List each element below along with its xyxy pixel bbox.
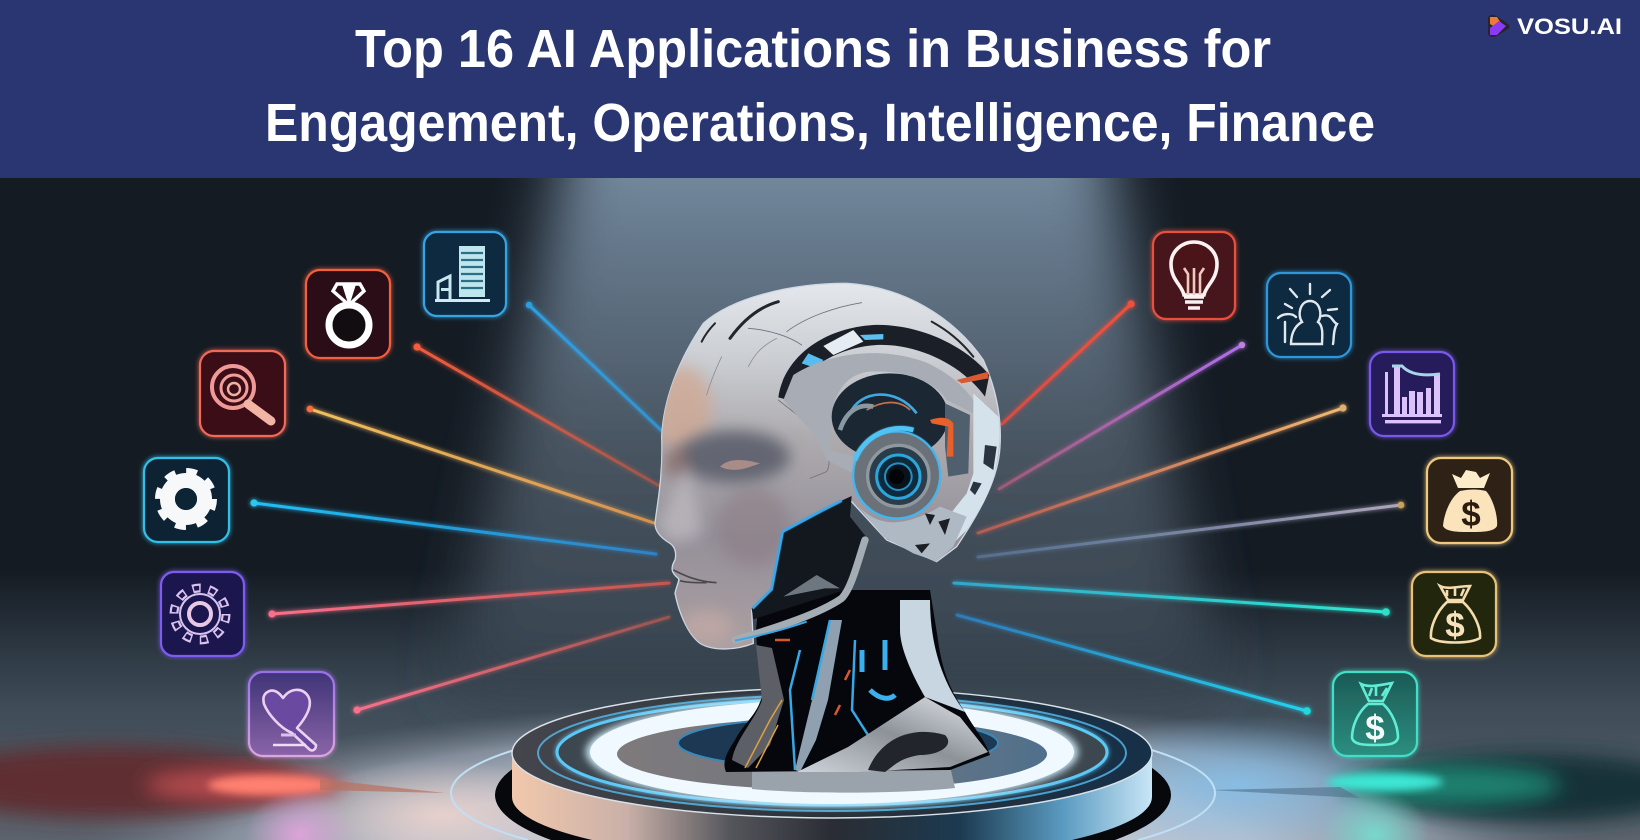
icon: building (424, 232, 506, 316)
icon: money bag outline (1412, 572, 1496, 656)
hole front wall (752, 766, 955, 793)
skull grooves (702, 302, 973, 478)
line: bag two (954, 583, 1390, 616)
icon: light bulb (1153, 232, 1235, 319)
line: ring (413, 343, 663, 488)
title (265, 19, 1375, 153)
pedestal top (512, 688, 1152, 818)
silver plate (783, 353, 980, 473)
jaw blue edge (753, 501, 842, 608)
icon: money bag outline: $ (1445, 606, 1465, 645)
dark mech arch (778, 325, 989, 400)
glowing ring (586, 698, 1078, 806)
logo (1488, 14, 1622, 39)
icon: ring (306, 270, 390, 358)
mouth (673, 570, 717, 583)
robot head (655, 283, 1000, 649)
pedestal shadow (495, 713, 1171, 840)
title: Top 16 AI Applications in Business for (355, 19, 1271, 79)
jaw rod (735, 540, 865, 640)
face shading (655, 367, 790, 643)
inner mech cavity (832, 373, 970, 477)
floor light pool (122, 716, 1544, 840)
floor ring (450, 749, 1216, 840)
pedestal (495, 688, 1171, 840)
icon: people (1267, 273, 1351, 357)
title: Engagement, Operations, Intelligence, Finance (265, 93, 1375, 153)
line: outline gear (268, 583, 669, 618)
header band (0, 0, 1640, 178)
line: chart (978, 404, 1347, 533)
white shell (940, 393, 1000, 543)
skull and face (655, 283, 1000, 649)
icon: phone (249, 672, 334, 756)
line: phone (353, 617, 669, 714)
line: bulb (1002, 300, 1135, 424)
icon: money bag cream (1427, 458, 1512, 543)
icon: bar chart (1370, 352, 1454, 436)
jaw cavity (752, 496, 867, 619)
line: gear (250, 499, 656, 554)
background scene (0, 178, 1640, 840)
lower mech silver (853, 500, 967, 562)
pedestal side (512, 752, 1152, 840)
icon: money bag teal: $ (1365, 709, 1385, 748)
connector lines (250, 300, 1404, 715)
icon: outline gear (161, 572, 244, 656)
icon: money bag teal (1333, 672, 1417, 756)
line: bag three (957, 615, 1311, 715)
line: building (526, 302, 663, 432)
red floor glow (0, 746, 445, 840)
icon: gear (144, 458, 229, 542)
icon: magnifier (200, 351, 285, 436)
ear disc (853, 428, 940, 518)
hole (678, 717, 998, 769)
mech arch lights (802, 330, 988, 383)
line: bag one (978, 502, 1404, 557)
chest plate (797, 697, 988, 772)
teal floor glow (1210, 754, 1640, 840)
icon: money bag cream: $ (1461, 495, 1481, 534)
line: people (999, 342, 1245, 489)
logo: VOSU.AI (1517, 14, 1622, 39)
neck (724, 590, 990, 772)
line: magnifier (307, 406, 654, 523)
